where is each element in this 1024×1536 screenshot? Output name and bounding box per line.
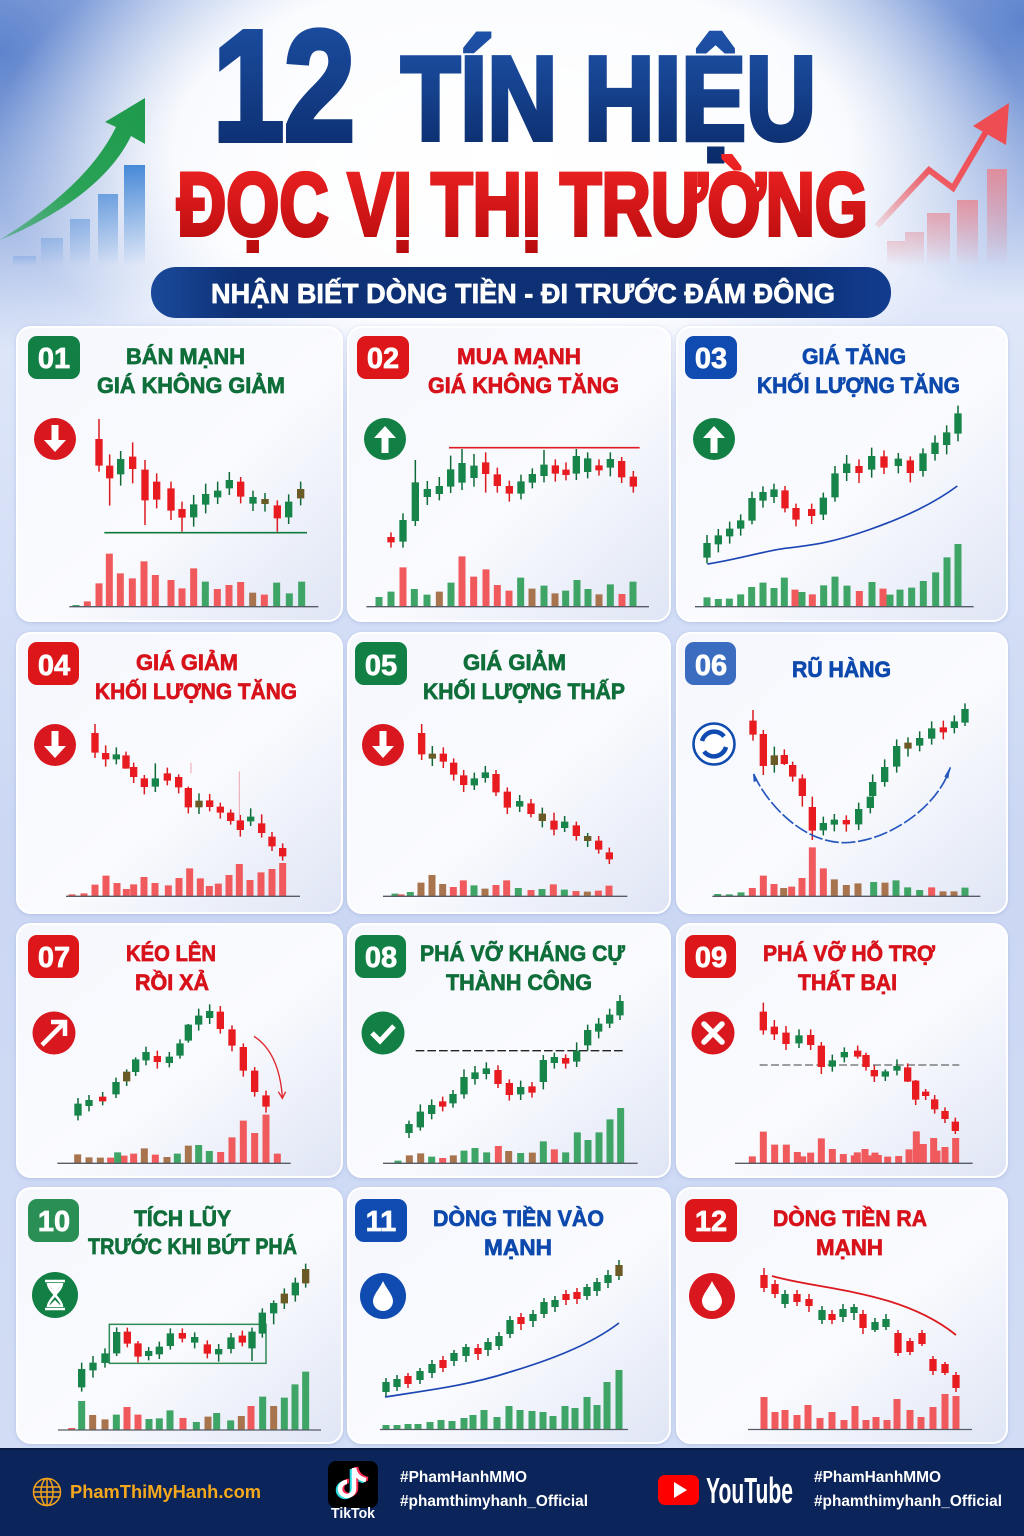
- candlestick chart: [391, 448, 640, 548]
- badge 07: [28, 935, 79, 978]
- candlestick chart: [99, 419, 307, 533]
- icon: down arrow: [362, 724, 404, 766]
- tiktok hashtags: [400, 1469, 588, 1510]
- heading: BÁN MẠNH: [126, 344, 245, 369]
- panel: 02 mua mạnh giá không tăng: [348, 327, 670, 621]
- volume bars: [748, 1394, 972, 1430]
- panel: 04 giá giảm khối lượng tăng: [17, 633, 342, 913]
- badge 01: [28, 336, 80, 379]
- heading: [757, 344, 960, 398]
- icon: up arrow: [693, 418, 735, 460]
- title: [177, 0, 868, 254]
- curved dashed arrow: [753, 767, 950, 843]
- icon: blue water drop: [360, 1273, 406, 1319]
- candlestick chart with consolidation box: [82, 1264, 306, 1392]
- badge 02: 02: [367, 343, 399, 375]
- candlestick chart: [760, 1003, 959, 1134]
- candlestick chart: [385, 1260, 619, 1397]
- heading: THẤT BẠI: [798, 970, 897, 995]
- youtube logo: [658, 1470, 793, 1511]
- icon: cross: [692, 1012, 734, 1054]
- heading: [126, 941, 216, 995]
- heading: KHỐI LƯỢNG THẤP: [423, 678, 625, 704]
- badge 06: [685, 642, 736, 685]
- heading: TRƯỚC KHI BỨT PHÁ: [88, 1234, 297, 1259]
- volume bars: [366, 556, 649, 607]
- candlestick chart: [78, 1004, 266, 1120]
- heading: GIÁ KHÔNG GIẢM: [97, 373, 285, 398]
- heading: DÒNG TIỀN RA: [773, 1206, 927, 1231]
- heading: DÒNG TIỀN VÀO: [433, 1206, 604, 1231]
- panel: 03 giá tăng khối lượng tăng: [677, 327, 1007, 621]
- website link with globe icon: PhamThiMyHanh.com: [70, 1482, 261, 1502]
- title line one: 12 tín hiệu: 12: [213, 0, 355, 174]
- candlestick chart: [409, 995, 625, 1138]
- badge 12: [685, 1199, 737, 1242]
- panel: 05 giá giảm khối lượng thấp: [348, 633, 670, 913]
- title line one: 12 tín hiệu: TÍN HIỆU: [401, 32, 816, 166]
- volume bars: [58, 1372, 321, 1430]
- subtitle pill: NHẬN BIẾT DÒNG TIỀN - ĐI TRƯỚC ĐÁM ĐÔNG: [211, 277, 835, 309]
- heading: GIÁ KHÔNG TĂNG: [428, 373, 619, 398]
- badge 03: 03: [695, 343, 727, 375]
- title line one: 12 tín hiệu: [213, 0, 816, 174]
- badge 11: 11: [366, 1206, 396, 1238]
- icon: red water drop: [689, 1273, 735, 1319]
- subtitle pill: [151, 267, 891, 318]
- badge 02: [357, 336, 409, 379]
- badge 12: 12: [695, 1206, 727, 1238]
- youtube hashtags: [814, 1469, 1002, 1510]
- heading: [97, 344, 285, 398]
- heading: PHÁ VỠ HỖ TRỢ: [763, 940, 935, 966]
- badge 07: 07: [38, 942, 70, 974]
- icon: down arrow: [34, 418, 76, 460]
- volume bars: [383, 875, 627, 896]
- tiktok logo: TikTok: [331, 1506, 376, 1522]
- candlestick chart: [422, 724, 609, 864]
- panel: 12 dòng tiền ra mạnh: [677, 1188, 1007, 1443]
- panel: 08 phá vỡ kháng cự thành công: [348, 924, 670, 1177]
- youtube hashtags: #phamthimyhanh_Official: [814, 1493, 1002, 1510]
- badge 05: [355, 642, 407, 685]
- heading: [763, 940, 935, 995]
- badge 09: [685, 935, 736, 978]
- heading: GIÁ GIẢM: [136, 650, 238, 675]
- heading: KHỐI LƯỢNG TĂNG: [757, 372, 960, 398]
- panel: 07 kéo lên rồi xả: [17, 924, 342, 1177]
- candlestick chart: [707, 406, 958, 564]
- website link with globe icon: [34, 1478, 261, 1506]
- panel: 09 phá vỡ hỗ trợ thất bại: [677, 924, 1007, 1177]
- panel: 06 rũ hàng: [677, 633, 1007, 913]
- panel: 01 bán mạnh giá không giảm: [17, 327, 342, 621]
- badge 08: 08: [365, 942, 397, 974]
- footer band: [0, 1448, 1024, 1536]
- tiktok hashtags: #phamthimyhanh_Official: [400, 1493, 588, 1510]
- youtube logo: YouTube: [706, 1470, 793, 1511]
- red falling arrow: [254, 1036, 286, 1098]
- volume bars: [380, 1370, 628, 1430]
- icon: check mark: [362, 1012, 404, 1054]
- icon: down arrow: [34, 724, 76, 766]
- panel: 11 dòng tiền vào mạnh: [348, 1188, 670, 1443]
- heading: GIÁ GIẢM: [463, 650, 566, 675]
- youtube hashtags: #PhamHanhMMO: [814, 1469, 941, 1486]
- volume bars: [383, 1108, 638, 1163]
- heading: GIÁ TĂNG: [802, 344, 906, 369]
- heading: [433, 1206, 604, 1260]
- panel: 10 tích lũy trước khi bứt phá: [17, 1188, 342, 1443]
- badge 10: [28, 1199, 79, 1242]
- heading: TÍCH LŨY: [134, 1206, 231, 1231]
- decoration: rising green arrow and blue bars: [0, 98, 145, 266]
- badge 10: 10: [38, 1206, 70, 1238]
- tiktok logo: [328, 1461, 378, 1522]
- icon: up arrow: [364, 418, 406, 460]
- heading: [88, 1206, 297, 1259]
- volume bars: [735, 1131, 973, 1163]
- volume bars: [695, 544, 974, 607]
- heading: RỒI XẢ: [135, 970, 209, 995]
- tiktok hashtags: #PhamHanhMMO: [400, 1469, 527, 1486]
- badge 01: 01: [38, 343, 70, 375]
- heading: RŨ HÀNG: [792, 657, 891, 682]
- heading: MẠNH: [484, 1235, 552, 1260]
- badge 11: [355, 1199, 407, 1242]
- icon: circular arrows: [694, 724, 734, 764]
- icon: up-right arrow: [32, 1012, 76, 1054]
- candlestick chart: [753, 703, 965, 840]
- badge 05: 05: [365, 650, 397, 682]
- volume bars: [66, 863, 300, 896]
- badge 06: 06: [695, 650, 727, 682]
- candlestick chart: [95, 724, 283, 861]
- heading: [428, 344, 619, 398]
- badge 04: 04: [38, 650, 70, 682]
- heading: [423, 650, 625, 704]
- badge 03: [685, 336, 737, 379]
- heading: [773, 1206, 927, 1260]
- badge 04: [28, 642, 79, 685]
- heading: MẠNH: [816, 1235, 883, 1260]
- volume bars: [712, 847, 980, 896]
- heading: KÉO LÊN: [126, 941, 216, 966]
- heading: [95, 650, 297, 704]
- decoration: rising red arrow and pink bars: [877, 103, 1009, 266]
- heading: THÀNH CÔNG: [446, 970, 592, 995]
- icon: hourglass: [32, 1272, 78, 1318]
- volume bars: [57, 1115, 291, 1163]
- heading: MUA MẠNH: [457, 344, 581, 369]
- heading: KHỐI LƯỢNG TĂNG: [95, 678, 297, 704]
- candlestick chart: [764, 1268, 956, 1392]
- volume bars: [69, 554, 318, 607]
- heading: [420, 941, 626, 995]
- badge 08: [355, 935, 406, 978]
- badge 09: 09: [695, 942, 727, 974]
- heading: PHÁ VỠ KHÁNG CỰ: [420, 941, 626, 966]
